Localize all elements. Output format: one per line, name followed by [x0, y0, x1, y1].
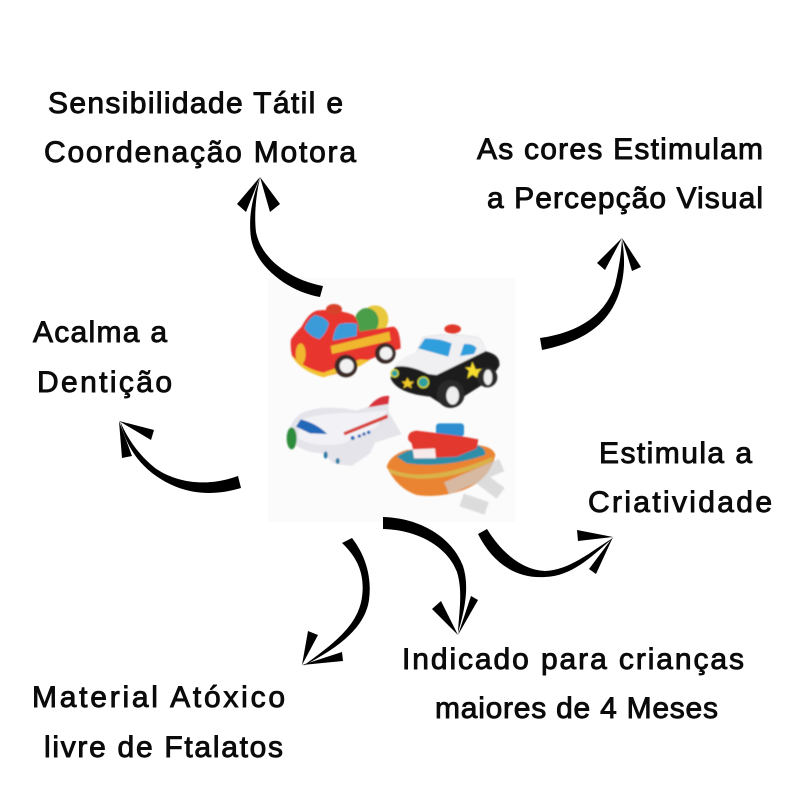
text: As cores Estimulam a Percepção Visual: a Percepção Visual [487, 182, 763, 215]
arrow: to Dentição [119, 421, 241, 493]
arrow: to Criatividade [478, 529, 613, 577]
text: Sensibilidade Tátil e Coordenação Motora [44, 87, 356, 169]
text: Sensibilidade Tátil e Coordenação Motora: Sensibilidade Tátil e [48, 87, 343, 120]
text: Material Atóxico livre de Ftalatos: livre de Ftalatos [44, 731, 283, 764]
text: Material Atóxico livre de Ftalatos [32, 681, 285, 764]
text: As cores Estimulam a Percepção Visual [477, 133, 763, 215]
arrow: to Percepção Visual [540, 238, 641, 350]
arrow: to Material Atóxico [302, 538, 370, 666]
icon: airplane [287, 396, 402, 466]
icon: police car [391, 324, 499, 408]
text: Indicado para crianças maiores de 4 Meses: maiores de 4 Meses [435, 692, 718, 725]
text: Acalma a Dentição [33, 316, 172, 399]
text: Acalma a Dentição: Acalma a [33, 316, 167, 349]
text: Indicado para crianças maiores de 4 Meses [402, 643, 744, 725]
arrow: to Indicado [383, 517, 478, 635]
text: Sensibilidade Tátil e Coordenação Motora: Coordenação Motora [44, 136, 356, 169]
arrow: to Sensibilidade Tátil [237, 177, 323, 297]
text: As cores Estimulam a Percepção Visual: As cores Estimulam [477, 133, 763, 166]
icon: boat [387, 423, 495, 496]
text: Acalma a Dentição: Dentição [37, 366, 172, 399]
text: Indicado para crianças maiores de 4 Meses: Indicado para crianças [402, 643, 744, 676]
text: Estimula a Criatividade: Criatividade [588, 486, 772, 519]
panel: toy photo [268, 278, 515, 522]
watermark: pale cross [447, 465, 502, 508]
text: Estimula a Criatividade [588, 437, 772, 519]
icon: fire truck [291, 304, 401, 377]
text: Estimula a Criatividade: Estimula a [599, 437, 752, 470]
text: Material Atóxico livre de Ftalatos: Material Atóxico [32, 681, 285, 714]
